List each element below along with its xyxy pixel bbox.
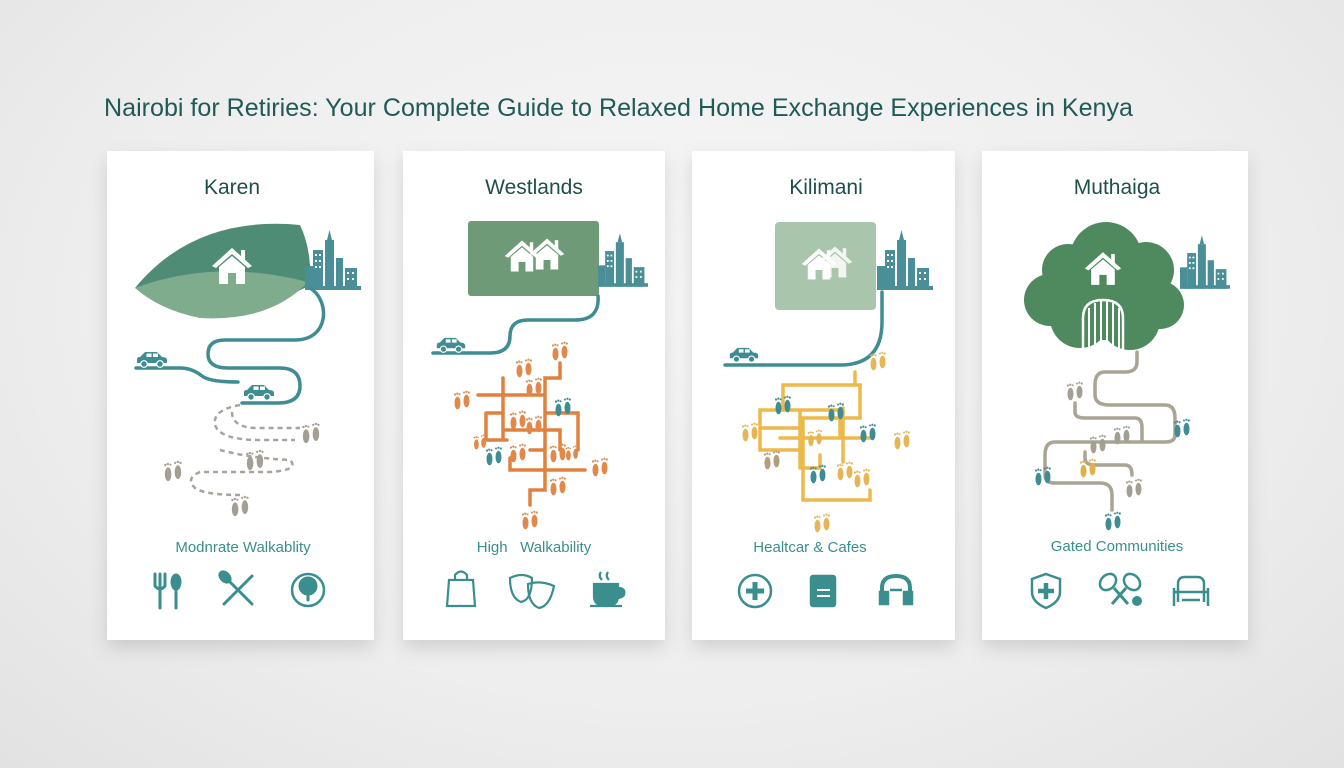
road bbox=[725, 292, 882, 365]
label: Healtcar & Cafes bbox=[753, 539, 867, 556]
icons bbox=[447, 572, 624, 608]
orange street grid bbox=[478, 363, 585, 505]
leaf with house bbox=[135, 224, 310, 318]
footprints bbox=[164, 423, 320, 516]
road bbox=[136, 288, 324, 403]
icons bbox=[739, 575, 912, 607]
green block with houses bbox=[468, 221, 599, 296]
panel: Muthaiga bbox=[982, 151, 1248, 640]
label: Modnrate Walkablity bbox=[175, 539, 311, 556]
heading: Kilimani: Kilimani bbox=[789, 176, 863, 199]
dotted walking path bbox=[191, 405, 300, 495]
icon: city skyline bbox=[305, 230, 361, 290]
light green block with house bbox=[775, 222, 876, 310]
panel: Karen bbox=[107, 151, 374, 640]
footprints bbox=[454, 342, 608, 529]
title: Nairobi for Retiries: Your Complete Guide to Relaxed Home Exchange Experiences in Kenya bbox=[104, 94, 1133, 122]
heading: Westlands: Westlands bbox=[485, 176, 583, 199]
icon: cars bbox=[137, 352, 274, 400]
footprints bbox=[1067, 382, 1142, 497]
label: Gated Communities bbox=[1051, 538, 1183, 555]
footprints bbox=[742, 352, 910, 532]
heading: Karen: Karen bbox=[204, 176, 260, 199]
grey path bbox=[1045, 352, 1175, 510]
icon: car bbox=[730, 348, 758, 362]
icon: city skyline bbox=[1180, 235, 1230, 289]
yellow street grid bbox=[760, 372, 870, 500]
icon: city skyline bbox=[598, 233, 648, 287]
road bbox=[433, 296, 598, 353]
icon: car bbox=[437, 338, 465, 352]
label: High Walkability bbox=[477, 539, 592, 556]
icon: city skyline bbox=[877, 230, 933, 290]
panel: Kilimani bbox=[692, 151, 955, 640]
heading: Muthaiga: Muthaiga bbox=[1074, 176, 1161, 199]
icons bbox=[155, 570, 324, 608]
panel: Westlands bbox=[403, 151, 665, 640]
icons bbox=[1032, 571, 1208, 608]
tree canopy with house and gate bbox=[1024, 222, 1184, 352]
